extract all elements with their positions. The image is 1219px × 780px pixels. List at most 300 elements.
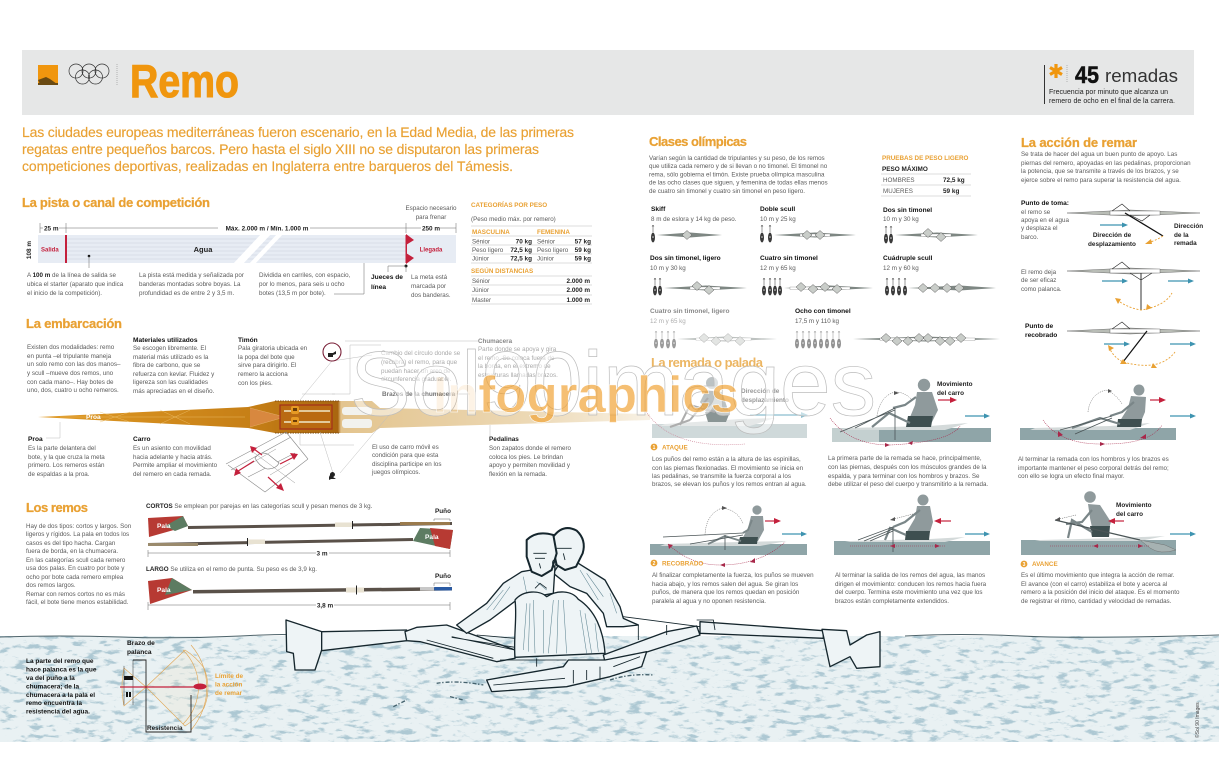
step: advance: 3 [1023, 562, 1026, 568]
watermark: Sol90images [350, 334, 876, 435]
text: seat: del remero en cada remada. [133, 471, 212, 478]
stat: 45 remadas: Frecuencia por minuto que alcanza un [1049, 89, 1168, 96]
text: recovery extension: Al terminar la salida de los remos del agua, las manos [835, 572, 985, 579]
text: finish [1018, 456, 1169, 480]
text: oarlock circle caption: (recobra) el remo, para que [381, 359, 458, 366]
text: oars description [26, 523, 132, 606]
panel: lever diagram [26, 640, 243, 732]
foam around hull [393, 675, 653, 707]
text: rudder [238, 337, 308, 387]
text: lever caption: chumacera a la pala el [26, 692, 95, 699]
table: weight categories: Sénior [472, 238, 490, 246]
diagram: lever loses effect [1021, 262, 1200, 310]
text: oarlock: estructuras llamadas brazos. [478, 372, 558, 379]
text: seat: hacia adelante y hacia atrás. [133, 454, 213, 461]
dimension: 3 m [148, 550, 450, 558]
label: lever arm: palanca [127, 649, 152, 656]
text: bow: de espaldas a la proa. [28, 471, 90, 478]
text: attack: brazos, se elevan los puños y los remos entran al agua. [652, 481, 807, 488]
table: weight categories: CATEGORÍAS POR PESO [471, 200, 547, 209]
label: limit of rowing action: Límite de [215, 673, 243, 680]
heading: La pista o canal de competición [22, 195, 210, 210]
text: sliding seat use: disciplina participe en los [372, 461, 441, 468]
label: limit of rowing action: la acción [215, 682, 242, 688]
text: oars description: ocho por bote cada remero emplea [26, 574, 124, 581]
credit: ©Sol 90 Images [1194, 702, 1201, 738]
scene: advance [1021, 491, 1196, 555]
dimension: 3,8 m [148, 602, 450, 610]
label: displacement direction: desplazamiento [741, 397, 789, 404]
class: double scull: 10 m y 25 kg [760, 216, 796, 223]
text: materials: Materiales utilizados [133, 337, 198, 344]
text: oarlock: Parte donde se apoya y gira [478, 346, 557, 353]
text: advance: Es el último movimiento que integra la acción de remar. [1021, 572, 1175, 579]
step: attack: ATAQUE [662, 444, 688, 452]
class: coxless four: Cuatro sin timonel [760, 255, 818, 262]
text: lanes: Dividida en carriles, con espacio, [259, 272, 351, 279]
class: eight with coxswain: 17,5 m y 110 kg [795, 318, 840, 325]
heading: La embarcación [26, 316, 122, 331]
track diagram: Agua [194, 245, 213, 254]
text: materials: más apreciadas en el diseño. [133, 388, 215, 395]
icon: asterisk [1050, 64, 1062, 78]
class: coxless four: 12 m y 65 kg [760, 265, 796, 272]
table: weight categories: FEMENINA [537, 229, 570, 236]
text: sliding seat use: juegos olímpicos. [371, 469, 421, 476]
class: skiff: 8 m de eslora y 14 kg de peso. [651, 216, 737, 223]
table: weight categories: 2.000 m [567, 278, 590, 285]
track diagram: Espacio necesario [405, 205, 457, 212]
text: recovery [652, 572, 814, 605]
text: oarlock circle caption [381, 350, 461, 383]
heading: La remada o palada [651, 355, 764, 370]
text: sliding seat use: El uso de carro móvil es [372, 444, 439, 451]
icon: rowing pictogram [38, 65, 58, 85]
label: seat movement 2 [1116, 502, 1152, 518]
text: finish: importante mantener el peso corporal detrás del remo; [1018, 465, 1169, 472]
text: action description [1021, 151, 1191, 184]
diagram: recovery point: Punto de [1025, 323, 1054, 330]
table: weight categories: 57 kg [575, 238, 591, 246]
text: rudder: remero la acciona [238, 371, 288, 378]
text: lanes: botes (13,5 m por bote). [259, 290, 326, 297]
text: bow: primero. Los remeros están [28, 462, 105, 469]
class: quadruple scull: 12 m y 60 kg [883, 265, 919, 272]
class: lightweight coxless four: Cuatro sin timonel, ligero [650, 308, 730, 315]
dimension: 3,8 m: 3,8 m [317, 602, 333, 610]
text: recovery extension [835, 572, 987, 605]
class: skiff [651, 206, 737, 242]
text: materials: refuerza con kevlar. Fluidez y [133, 371, 215, 378]
label: oarlock arms: Brazos de la chumacera [382, 391, 456, 398]
class: skiff: Skiff [651, 206, 666, 213]
text: finish [411, 274, 451, 299]
diagram: lever loses effect: como palanca. [1021, 286, 1062, 293]
stat: 45 remadas: remero de ocho en el final de la carrera. [1049, 98, 1175, 105]
text: attack: con las piernas flexionadas. El movimiento se inicia en [652, 465, 804, 472]
table: lightweight: MUJERES [883, 188, 913, 195]
stat: 45 remadas [1044, 62, 1178, 105]
text: starter: el inicio de la competición). [27, 290, 102, 297]
oar: short bottom: Pala [425, 534, 439, 541]
text: recovery: Al finalizar completamente la fuerza, los puños se mueven [652, 572, 814, 579]
label: lever arm [127, 640, 155, 656]
text: foot stretchers: Son zapatos donde el remero [489, 445, 572, 452]
diagram: catch point: Dirección [1174, 223, 1203, 230]
text: finish: dos banderas. [411, 292, 451, 299]
text: recovery: puños, de manera que los remos quedan en posición [652, 589, 800, 596]
track diagram: Salida [41, 248, 59, 254]
text: oarlock circle caption: puedan hacer un arco de [381, 368, 451, 375]
class: quadruple scull: Cuádruple scull [883, 255, 933, 262]
text: lever caption: La parte del remo que [26, 658, 94, 665]
label: limit of rowing action: de remar [215, 690, 243, 697]
panel: the stroke [645, 355, 1196, 605]
icon: rudder detail circle [323, 343, 341, 361]
text: starter: A 100 m de la línea de salida se [27, 272, 116, 279]
text: flags [139, 272, 244, 297]
text: modalities [27, 344, 121, 394]
text: materials: ligereza son las cualidades [133, 379, 208, 386]
label: line judges: Jueces de [371, 274, 403, 281]
text: oarlock: Chumacera [478, 338, 513, 345]
oar: long [148, 578, 452, 604]
table: lightweight: HOMBRES [883, 177, 915, 184]
oar: long: Pala [157, 587, 171, 594]
table: weight categories: 1.000 m [567, 297, 590, 304]
class: coxless four [760, 255, 873, 296]
text: lever caption [26, 658, 97, 716]
text: classes description: que utiliza cada remero y de si llevan o no timonel. El timonel no [649, 163, 828, 170]
text: recovery: paralela al agua y no oponen resistencia. [652, 598, 766, 605]
panel: water background [0, 634, 1219, 742]
text: lanes [259, 272, 351, 297]
text: modalities: Existen dos modalidades: remo [27, 344, 115, 351]
text: materials: fibra de carbono, que se [133, 362, 201, 369]
text: starter [27, 272, 124, 297]
text: oarlock [478, 338, 558, 379]
table: weight categories: SEGÚN DISTANCIAS [471, 266, 533, 275]
text: classes description: de las ocho clases que siguen, y femenina de todas ellas menos [649, 180, 828, 186]
text: lever caption: hace palanca es la que [26, 666, 97, 674]
text: classes description: rema, sólo gobierna el timón. Existe prueba olímpica masculina [649, 172, 825, 178]
text: modalities: un solo remo con las dos manos– [27, 361, 121, 368]
panel: oars [26, 500, 453, 610]
text: foot stretchers: coloca los pies. Le brindan [489, 454, 564, 461]
text: advance: de registrar el ritmo, cantidad y velocidad de remadas. [1021, 598, 1172, 605]
text: finish: Al terminar la remada con los hombros y los brazos es [1018, 456, 1169, 463]
text: modalities: en punta –el tripulante maneja [27, 353, 112, 360]
knees [515, 592, 605, 657]
table: weight categories: Júnior [537, 256, 554, 262]
text: sliding seat use: condición para que esta [372, 452, 439, 459]
step: recovery: RECOBRADO [662, 560, 703, 568]
heading: Clases olímpicas [649, 134, 747, 149]
text: oars description: dos remos largos. [26, 582, 76, 589]
face details [533, 548, 572, 588]
text: foot stretchers: Pedalinas [489, 436, 519, 443]
hull [487, 652, 647, 692]
label: line judges: línea [371, 284, 386, 291]
diagram: recovery point [1025, 322, 1200, 368]
class: eight with coxswain: Ocho con timonel [795, 308, 851, 315]
diagram: catch point: el remo se [1021, 209, 1051, 216]
text: oars description: fácil, el bote tiene menos estabilidad. [26, 599, 129, 606]
text: lever caption: va del puño a la [26, 675, 75, 682]
text: oarlock: el remo. Se coloca fuera de [478, 355, 555, 362]
boat diagram: Proa [86, 414, 101, 421]
right oar and blade [700, 622, 823, 638]
table: weight categories: Júnior [472, 287, 489, 294]
panel: boat [26, 316, 650, 492]
text: lanes: por lo menos, para seis u ocho [259, 281, 345, 288]
text: foot stretchers: apoyo y permiten movilidad y [489, 462, 571, 469]
text: seat: Carro [133, 436, 151, 443]
table: weight categories: Peso ligero [537, 247, 569, 254]
text: attack [652, 456, 807, 488]
table: lightweight: 72,5 kg [943, 177, 965, 184]
step: advance [1021, 561, 1058, 568]
diagram: recovery point: recobrado [1025, 332, 1057, 339]
text: oars description: Hay de dos tipos: cortos y largos. Son [26, 523, 132, 530]
panel: Olympic classes [649, 134, 1000, 348]
right rigger [603, 626, 700, 662]
track diagram: Llegada [420, 248, 443, 254]
table: weight categories: 72,5 kg [510, 247, 532, 254]
back rower head [553, 528, 584, 570]
label: seat movement: del carro [937, 390, 964, 397]
track diagram: para frenar [416, 214, 446, 221]
right blade [822, 629, 880, 668]
icon: small rudder [329, 472, 336, 480]
text: rudder: con los pies. [238, 380, 273, 387]
text: short oars: CORTOS Se emplean por parejas en las categorías scull y pesan menos de 3 kg. [146, 503, 373, 510]
text: bow [28, 436, 105, 478]
track diagram: 25 m [44, 226, 59, 232]
step: attack: 1 [653, 445, 656, 451]
track diagram: Máx. 2.000 m / Mín. 1.000 m [226, 226, 309, 232]
text: action description: ejerce sobre el remo para superar la resistencia del agua. [1021, 177, 1181, 184]
table: lightweight: 59 kg [943, 188, 959, 195]
table: weight categories: 72,5 kg [510, 256, 532, 262]
text: oarlock circle caption: circunferencia graduable. [381, 376, 451, 383]
text: modalities: y scull –mueve dos remos, uno [27, 370, 114, 377]
text: drive: La primera parte de la remada se hace, principalmente, [828, 455, 982, 462]
text: classes description: Varían según la cantidad de tripulantes y su peso, de los remos [649, 155, 825, 162]
diagram: lever loses effect: de ser eficaz [1021, 277, 1056, 284]
text: flags: profundidad es de entre 2 y 3,5 m. [139, 290, 234, 297]
label: line judges [371, 274, 403, 291]
text: foot stretchers: flexión en la remada. [489, 471, 547, 478]
step: recovery [651, 560, 703, 568]
text: drive [828, 455, 988, 488]
text: lever caption: remo encuentra la [26, 700, 82, 707]
text: advance: remero a la posición del inicio del ataque. Es el momento [1021, 589, 1180, 596]
text: starter: ubica el starter (aparato que indica [27, 281, 124, 288]
text: bow: Proa [28, 436, 43, 443]
left oar [322, 630, 407, 651]
label: seat movement: Movimiento [937, 381, 973, 388]
table: weight categories: 2.000 m [567, 287, 590, 294]
label: seat movement 2: Movimiento [1116, 502, 1152, 509]
label: limit of rowing action [215, 673, 243, 697]
text: drive: espalda, y para terminar con los hombros y brazos. Se [828, 473, 980, 480]
intro text: competiciones deportivas, realizadas en Inglaterra entre barqueros del Támesis. [22, 158, 513, 174]
text: long oar: LARGO Se utiliza en el remo de punta. Su peso es de 3,9 kg. [146, 566, 317, 573]
intro text: regatas entre pequeños barcos. Pero hasta el siglo XIII no se disputaron las primeras [22, 141, 539, 157]
text: oars description: casos es del tipo hacha. Cargan [26, 540, 116, 547]
text: finish: La meta está [411, 274, 448, 281]
text: recovery: hacia abajo, y los remos salen del agua. Se giran los [652, 581, 798, 588]
stat: 45 remadas: remadas [1105, 66, 1178, 86]
table: weight categories: MASCULINA [472, 229, 510, 236]
diagram: catch point: desplazamiento [1088, 241, 1136, 248]
oar: short bottom [148, 528, 453, 549]
text: lever caption: chumacera; de la [26, 684, 79, 690]
label: long oar handle: Puño [435, 573, 451, 580]
heading: La acción de remar [1021, 135, 1137, 150]
text: attack: Los puños del remo están a la altura de las espinillas, [652, 456, 801, 463]
text: finish: marcada por [411, 283, 446, 290]
text: drive: con las piernas, después con los músculos grandes de la [828, 464, 987, 471]
table: weight categories [471, 200, 592, 304]
dimension: 3 m: 3 m [316, 550, 328, 558]
label: handle: Puño [435, 508, 451, 515]
diagram: catch point: Punto de toma: [1021, 200, 1069, 207]
table: weight categories: 70 kg [516, 238, 532, 246]
class: pair without coxswain: Dos sin timonel [883, 207, 932, 214]
left blade [286, 620, 322, 670]
diagram: catch point: de la [1174, 232, 1189, 239]
text: foot stretchers [489, 436, 572, 478]
text: action description: Se trata de hacer del agua un buen punto de apoyo. Las [1021, 151, 1177, 158]
text: oars description: Remar con remos cortos no es más [26, 591, 125, 598]
table: weight categories: Master [472, 297, 491, 304]
text: oarlock circle caption: Cambio del círculo donde se [381, 350, 461, 357]
text: classes description [649, 155, 828, 195]
table: lightweight [881, 155, 971, 196]
text: seat [133, 436, 218, 478]
text: advance: El avance (con el carro) estabiliza el bote y acerca al [1021, 581, 1167, 588]
text: materials: material más utilizado es la [133, 354, 209, 361]
illustration: two rowers [286, 528, 880, 707]
diagram: lever loses effect: El remo deja [1021, 269, 1057, 276]
table: weight categories: (Peso medio máx. por remero) [471, 216, 556, 223]
text: flags: La pista está medida y señalizada por [139, 272, 244, 279]
class: lightweight coxless four: 12 m y 65 kg [650, 318, 686, 325]
scene: recovery start [650, 505, 807, 567]
panel: the rowing action [1021, 135, 1203, 368]
step: recovery: 2 [653, 561, 656, 567]
label: seat movement 2: del carro [1116, 511, 1143, 518]
class: lightweight coxless four [650, 308, 777, 348]
class: double scull [760, 206, 856, 242]
diagram: catch point: Dirección de [1093, 232, 1132, 239]
heading: Los remos [26, 500, 88, 515]
class: lightweight pair: Dos sin timonel, ligero [650, 255, 721, 262]
diagram: catch point: apoya en el agua [1021, 217, 1069, 224]
title: Remo [130, 55, 239, 107]
intro text [22, 124, 574, 174]
text: rudder: Timón [238, 337, 258, 344]
text: modalities: uno, dos, cuatro u ocho remeros. [27, 387, 119, 394]
class: eight with coxswain [795, 308, 1000, 348]
track diagram: 108 m [26, 241, 33, 259]
text: flags: banderas montadas sobre boyas. La [139, 281, 241, 288]
icon: olympic rings [69, 64, 117, 85]
class: quadruple scull [883, 255, 996, 296]
left rigger [405, 625, 515, 662]
diagram: catch point: barco. [1021, 234, 1039, 241]
oar: short top: Pala [157, 523, 171, 530]
text: classes description: de cuatro sin timonel y cuatro sin timonel en peso ligero. [649, 188, 805, 195]
table: weight categories: Sénior [472, 278, 490, 285]
text: recovery extension: brazos están completamente extendidos. [835, 598, 949, 605]
class: double scull: Doble scull [760, 206, 795, 213]
text: oars description: En las categorías scull cada remero [26, 557, 126, 564]
label: displacement direction [741, 388, 789, 404]
table: weight categories: 59 kg [575, 247, 591, 254]
panel: competition track [22, 195, 592, 304]
diagram: lever [120, 645, 208, 732]
text: modalities: con cada mano–. Hay botes de [27, 379, 114, 386]
icon: sliding seat [226, 432, 308, 492]
header band [22, 50, 1194, 115]
label: seat movement [937, 381, 973, 397]
table: lightweight: PRUEBAS DE PESO LIGERO [882, 155, 969, 162]
intro text: Las ciudades europeas mediterráneas fueron escenario, en la Edad Media, de las primeras [22, 124, 574, 140]
diagram: catch point: remada [1174, 240, 1197, 247]
watermark: Infographics [433, 366, 739, 423]
step: advance: AVANCE [1032, 561, 1058, 568]
text: action description: la potencia, que se transmite a través de los brazos, y se [1021, 168, 1179, 175]
text: lever caption: resistencia del agua. [26, 708, 90, 716]
table: weight categories: Peso ligero [472, 247, 504, 254]
text: materials: Se escogen libremente. El [133, 345, 206, 352]
scene: drive [830, 379, 991, 447]
track diagram [26, 205, 457, 294]
text: drive: debe utilizar el peso del cuerpo y transmitirlo a la remada. [828, 481, 988, 488]
diagram: catch point [1021, 200, 1203, 248]
text: action description: piernas del remero, apoyadas en las pedalinas, proporcionan [1021, 160, 1191, 167]
label: displacement direction: Dirección de [741, 388, 780, 395]
scene: finish [1020, 384, 1196, 446]
text: recovery extension: del cuerpo. Termina este movimiento una vez que los [835, 589, 983, 596]
table: weight categories: Júnior [472, 256, 489, 262]
text: oars description: usa dos palas. En cuatro por bote y [26, 565, 125, 572]
class: pair without coxswain [883, 207, 978, 244]
text: oarlock: la borda, en el extremo de [478, 363, 551, 370]
class: pair without coxswain: 10 m y 30 kg [883, 216, 919, 223]
boat diagram [38, 341, 650, 473]
text: recovery extension: dirigen el movimiento: conducen los remos hacia fuera [835, 581, 987, 588]
scene: recovery extension [834, 494, 990, 555]
class: lightweight pair: 10 m y 30 kg [650, 265, 686, 272]
text: sliding seat use [371, 444, 441, 476]
back rower [553, 560, 638, 627]
text: oars description: fuera de borda, en la chumacera. [26, 548, 118, 555]
front rower body [457, 567, 555, 633]
text: advance [1021, 572, 1180, 605]
text: materials [133, 337, 215, 395]
class: lightweight pair [650, 255, 747, 296]
text: attack: las pedalinas, se transmite la fuerza corporal a los [652, 473, 791, 480]
diagram: catch point: y desplaza el [1021, 225, 1057, 232]
text: bow: bote, y la que cruza la meta [28, 454, 105, 461]
step: attack [651, 444, 688, 452]
stat: 45 remadas: 45 [1075, 62, 1099, 89]
text: finish: con ello se logra un efecto final mayor. [1018, 473, 1125, 480]
